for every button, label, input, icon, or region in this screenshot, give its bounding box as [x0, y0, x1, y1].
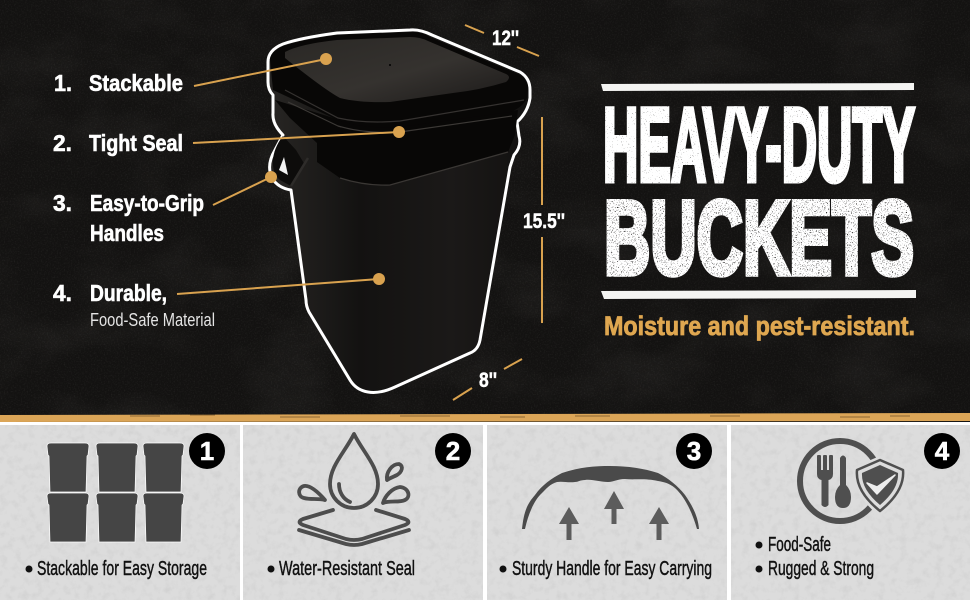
- dimension: 8 inch depth: [453, 359, 522, 400]
- callout 3: handles: Handles: [90, 220, 164, 246]
- caption 3: [500, 558, 712, 580]
- dimension: 12 inch width: [465, 25, 539, 56]
- callout 2: tight seal: Tight Seal: [89, 130, 183, 156]
- icon: six stacked buckets: [47, 443, 184, 542]
- callout 4: durable material: [53, 273, 385, 330]
- bucket photo illustration: [268, 30, 530, 392]
- caption 4: Food-Safe: [768, 534, 831, 556]
- background: dark chalkboard: [0, 0, 970, 415]
- caption 1: Stackable for Easy Storage: [37, 558, 207, 580]
- icon: plate with fork, spoon and shield: [800, 441, 905, 521]
- caption 4: Rugged & Strong: [768, 558, 874, 580]
- icon: water drop on layers: [299, 434, 409, 545]
- caption 2: [268, 558, 415, 580]
- dimension: 15.5 inch height: 15.5'': [523, 210, 565, 233]
- dimension: 8 inch depth: 8'': [479, 369, 497, 392]
- badge 3: 3: [687, 436, 701, 466]
- caption 3: Sturdy Handle for Easy Carrying: [512, 558, 712, 580]
- caption 1: [26, 558, 207, 580]
- bucket collar: [275, 100, 518, 185]
- bottom rule: [601, 290, 916, 299]
- bucket handle: [273, 136, 308, 186]
- panel 1: stackable storage: [0, 425, 240, 600]
- callout 1: stackable: [54, 53, 332, 96]
- top rule: [601, 83, 914, 91]
- title block: [601, 83, 916, 341]
- badge 2: 2: [446, 436, 460, 466]
- panel 4: food safe: [731, 425, 970, 600]
- subtitle: Moisture and pest-resistant.: [604, 311, 915, 341]
- badge 4: 4: [935, 436, 950, 466]
- orange divider strip: [0, 413, 970, 600]
- callout 1: stackable: 1.: [54, 70, 72, 96]
- callout 2: tight seal: 2.: [53, 130, 72, 156]
- badge 2: [435, 433, 471, 469]
- callout 4: durable material: Food-Safe Material: [90, 310, 215, 330]
- callout 4: durable material: Durable,: [90, 280, 167, 306]
- badge 1: [189, 433, 225, 469]
- caption 4: [756, 534, 874, 580]
- panel 2: water resistant: [243, 425, 483, 600]
- callout 2: tight seal: [53, 126, 405, 156]
- callout 3: handles: Easy-to-Grip: [90, 190, 204, 216]
- badge 4: [924, 433, 960, 469]
- callout 3: handles: 3.: [53, 190, 72, 216]
- badge 3: [676, 433, 712, 469]
- callout 4: durable material: 4.: [53, 280, 72, 306]
- callout 3: handles: [53, 171, 277, 246]
- bucket body: [268, 30, 530, 392]
- dimension: 12 inch width: 12'': [492, 27, 519, 50]
- heading: [603, 87, 915, 297]
- badge 1: 1: [200, 436, 214, 466]
- icon: three upward arrows: [559, 491, 669, 540]
- caption 2: Water-Resistant Seal: [279, 558, 415, 580]
- icon: curved handle: [522, 466, 699, 529]
- bucket lid: [270, 32, 528, 132]
- callout 1: stackable: Stackable: [89, 70, 183, 96]
- panel 3: sturdy handle: [487, 425, 727, 600]
